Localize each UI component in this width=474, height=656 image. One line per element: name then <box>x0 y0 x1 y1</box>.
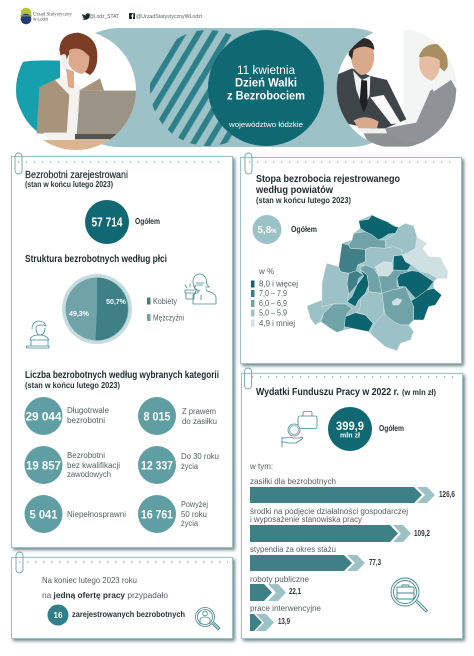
stat: over 50: życia <box>181 519 199 528</box>
heading: Bezrobotni zarejestrowani: Bezrobotni zarejestrowani <box>25 170 128 181</box>
bar: benefits <box>250 477 455 503</box>
choropleth map of counties <box>307 215 448 351</box>
label: Ogółem: Ogółem <box>135 217 160 226</box>
subheading: (stan w końcu lutego 2023) <box>25 180 113 189</box>
bar: business start-up: środki na podjęcie działalności gospodarczej <box>250 507 408 516</box>
legend: rate classes <box>251 267 298 328</box>
text: registered unemployed: zarejestrowanych bezrobotnych <box>72 610 185 619</box>
subheading: date: (stan w końcu lutego 2023) <box>25 381 120 390</box>
heading: Labour Fund: Wydatki Funduszu Pracy w 2022 r. <box>256 387 399 398</box>
legend: rate classes: 6,0 – 6,9 <box>259 299 287 308</box>
stat: under 30: Do 30 roku <box>181 452 219 461</box>
bar: business start-up <box>250 507 430 542</box>
total circle 399,9 mln zł <box>328 407 372 451</box>
stat: no qualifications: Bezrobotni <box>67 451 105 460</box>
stat: no qualifications: 19 857 <box>26 458 61 472</box>
stat: under 30 <box>138 446 219 484</box>
social: Facebook handle: @UrzadStatystycznyWLodzi <box>136 14 202 20</box>
heading: categories: Liczba bezrobotnych według wybranych kategorii <box>25 370 219 381</box>
label: w tym: w tym: <box>249 462 273 471</box>
stat: benefit <box>138 397 217 435</box>
photo: man and woman at a desk <box>336 28 457 148</box>
panel: unemployed registered <box>12 153 235 550</box>
rate circle 5,8%: 5,8% <box>257 225 277 236</box>
panel: Labour Fund expenditure <box>242 368 465 641</box>
rate circle 5,8% <box>252 215 282 244</box>
logo: Urząd Statystyczny w Łodzi: Urząd Statystyczny <box>33 12 72 18</box>
stat: disabled <box>24 495 126 533</box>
stat: benefit: Z prawem <box>182 407 216 416</box>
social: Twitter handle <box>82 13 120 20</box>
legend: rate classes: 5,0 – 5,9 <box>259 308 287 318</box>
bar: intervention work: 13,9 <box>278 617 290 626</box>
panel: job offers <box>12 552 235 641</box>
legend: rate classes: 4,9 i mniej <box>259 319 295 328</box>
stat: under 30: życia <box>181 462 199 471</box>
total circle 399,9 mln zł: 399,9 <box>336 421 364 433</box>
bar: public works: roboty publiczne <box>250 575 310 584</box>
heading: unemployment rate: Stopa bezrobocia rejestrowanego <box>256 174 400 185</box>
bar: internship: stypendia za okres stażu <box>250 545 336 554</box>
stat: over 50: Powyżej <box>181 500 208 509</box>
title circle: województwo łódzkie <box>228 120 303 129</box>
label: Ogółem: Ogółem <box>379 424 404 433</box>
bar: public works: 22,1 <box>289 587 301 596</box>
icon: man at laptop <box>26 321 49 348</box>
striped circle <box>150 30 266 146</box>
legend: gender: Mężczyźni <box>153 314 184 322</box>
text: end of February: Na koniec lutego 2023 roku <box>42 576 137 585</box>
pie chart: gender: 50,7% <box>106 299 127 306</box>
bar: intervention work <box>250 604 322 631</box>
stat: over 50: 16 761 <box>141 508 173 522</box>
bar: public works <box>250 575 310 601</box>
stat: long-term: Długotrwale <box>67 406 110 415</box>
stat: disabled: Niepełnosprawni <box>67 510 126 519</box>
header banner band <box>60 28 410 147</box>
icon: briefcase under magnifier <box>391 578 428 612</box>
stat: no qualifications: zawodowych <box>67 470 111 479</box>
heading: Labour Fund: (w mln zł) <box>402 388 436 397</box>
icon: hand with coin and briefcase <box>282 412 317 447</box>
icon: person under magnifier <box>196 608 220 630</box>
bar: benefits: 126,6 <box>439 490 455 499</box>
bar: internship <box>250 545 381 571</box>
heading: gender structure: Struktura bezrobotnych według płci <box>25 254 167 265</box>
stat: disabled: 5 041 <box>30 508 58 522</box>
bar: benefits: zasiłki dla bezrobotnych <box>250 477 336 486</box>
total circle 57 714: 57 714 <box>92 216 123 230</box>
badge: 16: 16 <box>54 611 63 620</box>
title circle <box>208 30 324 146</box>
stat: no qualifications: bez kwalifikacji <box>67 461 120 470</box>
stat: over 50: 50 roku <box>181 510 207 519</box>
stat: benefit: do zasiłku <box>182 417 217 426</box>
pie chart: gender <box>62 274 132 344</box>
total circle 399,9 mln zł: mln zł <box>340 430 361 440</box>
legend: rate classes: 8,0 i więcej <box>259 280 298 288</box>
photo: woman on phone with laptop <box>16 30 136 150</box>
stat: under 30: 12 337 <box>141 458 173 472</box>
bar: internship: 77,3 <box>369 558 381 567</box>
legend: rate classes: w % <box>258 267 274 276</box>
title circle: 11 kwietnia <box>237 65 296 77</box>
label: Ogółem: Ogółem <box>291 225 317 234</box>
stat: long-term <box>24 397 110 435</box>
panel: unemployment rate <box>240 153 464 366</box>
legend: rate classes: 7,0 – 7,9 <box>259 289 287 298</box>
stat: no qualifications <box>24 446 120 484</box>
bar: business start-up: i wyposażenie stanowiska pracy <box>250 515 362 524</box>
icon: woman <box>185 274 216 304</box>
heading: unemployment rate: według powiatów <box>255 185 333 196</box>
stat: over 50 <box>138 495 208 533</box>
logo: Urząd Statystyczny w Łodzi: w Łodzi <box>33 16 48 22</box>
title circle: z Bezrobociem <box>227 90 305 102</box>
heading: unemployment rate <box>255 174 400 205</box>
stat: long-term: bezrobotni <box>67 416 105 425</box>
bar: intervention work: prace interwencyjne <box>250 604 322 613</box>
social: Twitter handle: @Lodz_STAT <box>89 14 120 20</box>
bar: business start-up: 109,2 <box>414 529 430 538</box>
title circle: Dzień Walki <box>235 78 297 90</box>
pie chart: gender: 49,3% <box>69 311 90 318</box>
badge: 16 <box>48 604 68 626</box>
text: per one offer: na jedną ofertę pracy przypadało <box>42 591 169 600</box>
stat: long-term: 29 044 <box>26 410 62 424</box>
logo: Urząd Statystyczny w Łodzi <box>20 8 72 24</box>
heading: unemployment rate: (stan w końcu lutego 2023) <box>256 196 351 205</box>
legend: gender <box>147 297 184 322</box>
stat: benefit: 8 015 <box>144 410 171 424</box>
legend: gender: Kobiety <box>153 297 177 306</box>
total circle 57 714 <box>85 200 129 244</box>
